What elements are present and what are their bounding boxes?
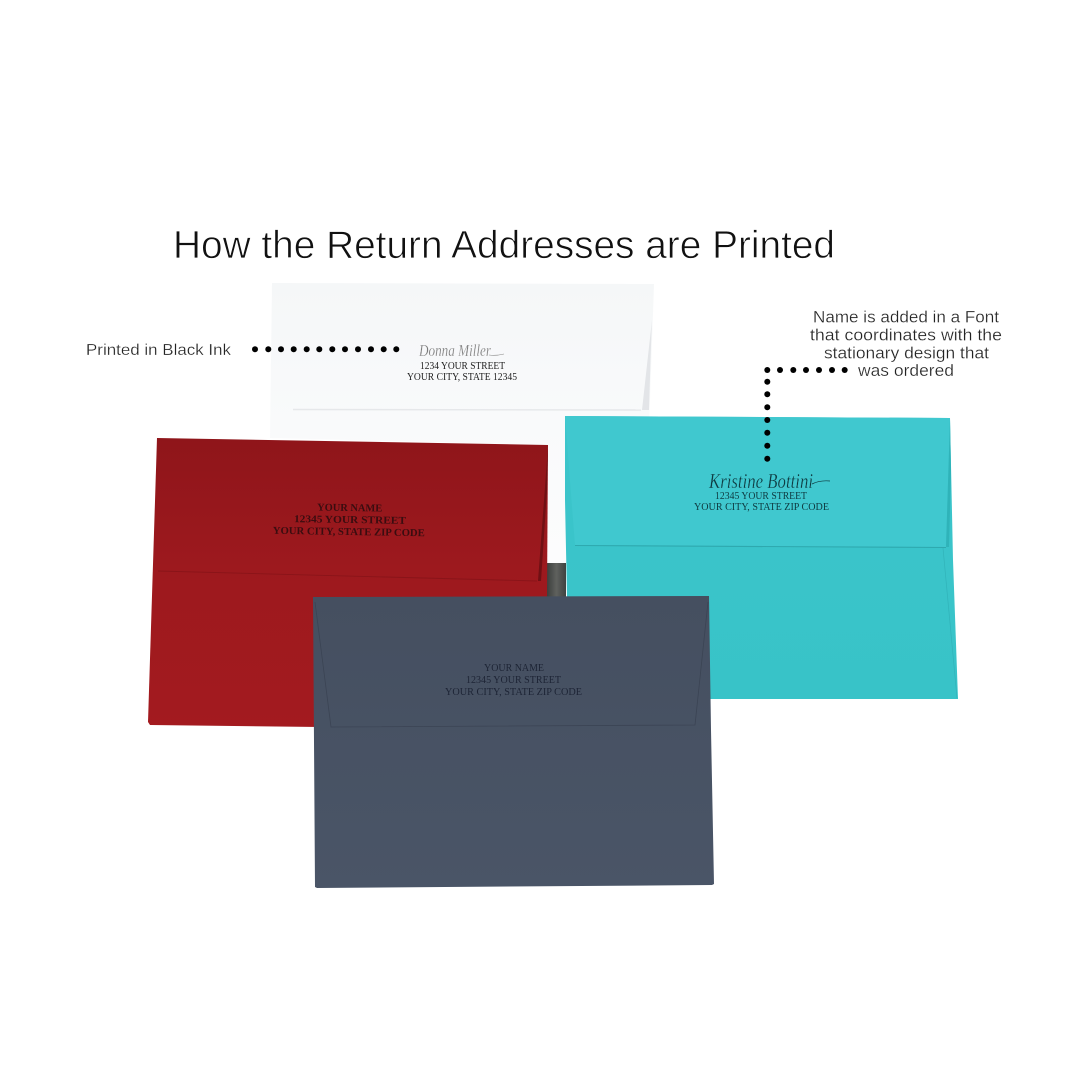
- red envelope address: YOUR NAME: [317, 502, 382, 515]
- red envelope body: [148, 438, 548, 727]
- grey envelope address: YOUR CITY, STATE ZIP CODE: [445, 687, 582, 698]
- envelope: red: [148, 438, 548, 727]
- red envelope address: YOUR CITY, STATE ZIP CODE: [273, 526, 425, 539]
- dotted arrow: name font: [764, 367, 848, 462]
- grey envelope flap edges: [315, 602, 708, 727]
- teal envelope flap edge: [575, 546, 946, 548]
- red envelope address: 12345 YOUR STREET: [294, 514, 406, 527]
- teal envelope body: [565, 416, 958, 699]
- callout: name font note: was ordered: [857, 362, 954, 380]
- white envelope body: [270, 283, 654, 563]
- white envelope address: Donna Miller: [418, 341, 491, 360]
- teal envelope address: Kristine Bottini: [708, 469, 813, 493]
- callout: name font note: that coordinates with the: [810, 326, 1002, 344]
- teal envelope address: [694, 469, 830, 513]
- teal envelope address: 12345 YOUR STREET: [715, 491, 808, 502]
- grey envelope body: [313, 596, 714, 888]
- label: printed in black ink: Printed in Black Ink: [86, 342, 232, 359]
- red envelope flap shadow: [538, 447, 548, 581]
- white envelope flap edge: [293, 408, 641, 411]
- callout: name font note: stationary design that: [824, 344, 989, 362]
- teal envelope flap: [565, 416, 950, 547]
- grey envelope address: 12345 YOUR STREET: [466, 675, 562, 686]
- callout: name font note: Name is added in a Font: [813, 308, 999, 326]
- callout: name font note: [810, 308, 1002, 380]
- white envelope address: 1234 YOUR STREET: [420, 361, 506, 372]
- dotted arrow: black ink: [252, 346, 399, 352]
- grey envelope address: YOUR NAME: [484, 663, 544, 674]
- teal envelope side seam: [943, 548, 957, 698]
- envelope: teal: [565, 416, 958, 699]
- teal envelope address: YOUR CITY, STATE ZIP CODE: [694, 502, 829, 513]
- red envelope address: [273, 502, 425, 539]
- dark background strip: [547, 563, 566, 598]
- envelope: grey: [313, 596, 714, 888]
- white envelope address: [407, 341, 517, 383]
- envelope: white: [270, 283, 654, 563]
- white envelope flap shadow: [642, 320, 652, 410]
- red envelope flap edge: [158, 571, 537, 581]
- grey envelope address: [445, 663, 582, 698]
- white envelope address: YOUR CITY, STATE 12345: [407, 372, 517, 383]
- teal envelope flap shadow: [946, 419, 951, 547]
- title: How the Return Addresses are Printed: [173, 224, 835, 267]
